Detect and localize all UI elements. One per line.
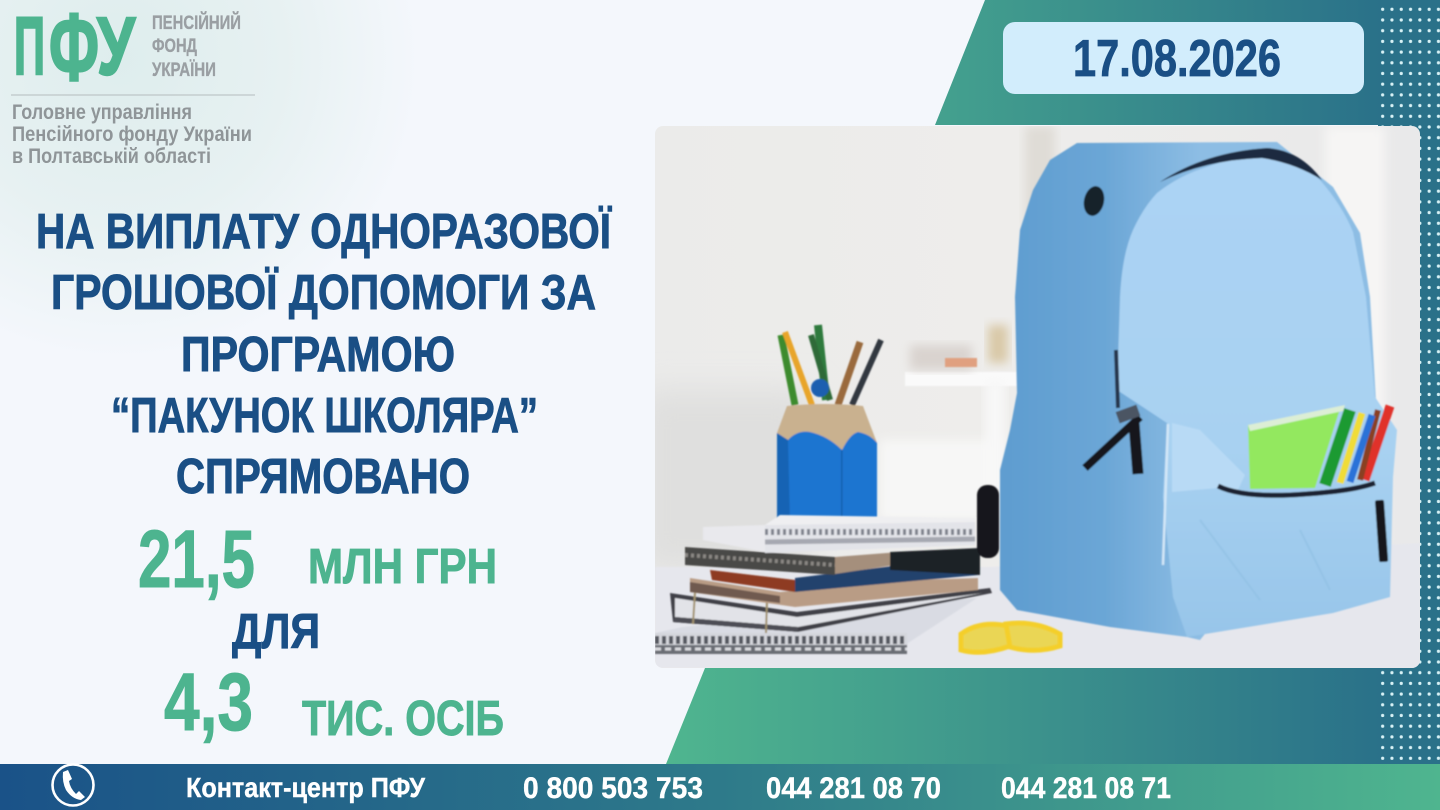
yellow scissors (961, 623, 1060, 652)
bottom spiral notebook (662, 598, 974, 642)
dark spiral notebook (685, 547, 835, 575)
pocket zipper pull (1375, 500, 1388, 562)
main heading: ГРОШОВОЇ ДОПОМОГИ ЗА (51, 266, 596, 320)
logo block (11, 0, 255, 168)
top teal banner (935, 0, 1440, 125)
backpack eyelet (1082, 185, 1106, 217)
backpack (1000, 142, 1397, 640)
contact centre label: Контакт-центр ПФУ (186, 772, 426, 803)
regional office name: Головне управління (12, 101, 192, 124)
logo wordmark: УКРАЇНИ (152, 60, 216, 81)
logo mark: У (97, 1, 136, 92)
logo wordmark: ПЕНСІЙНИЙ (152, 12, 241, 34)
fabric folds (1200, 520, 1302, 539)
photo: backpack and stationery (640, 126, 1420, 668)
backpack side panel (1000, 142, 1377, 640)
regional office name: в Полтавській області (12, 145, 211, 168)
date badge: 17.08.2026 (1073, 30, 1281, 88)
pencil cup with pencils (777, 325, 881, 523)
people unit: ТИС. ОСІБ (302, 692, 504, 746)
main heading: ПРОГРАМОЮ (181, 328, 455, 382)
amount value: 21,5 (138, 514, 255, 605)
logo mark (14, 0, 136, 101)
notebook stack (655, 485, 999, 654)
phone numbers: 0 800 503 753 (523, 772, 703, 805)
main heading: СПРЯМОВАНО (176, 450, 470, 504)
front pocket gather (1172, 423, 1245, 492)
connector word: ДЛЯ (232, 605, 320, 659)
logo wordmark (152, 12, 241, 81)
main heading (36, 205, 612, 504)
top white notebook (765, 515, 975, 525)
logo wordmark: ФОНД (152, 36, 197, 57)
phone numbers: 044 281 08 71 (1001, 772, 1171, 805)
footer bar (0, 764, 1440, 810)
main zipper pull (1085, 350, 1140, 474)
phone numbers (523, 772, 1171, 805)
blurred background room (640, 126, 1385, 570)
date badge (1003, 22, 1364, 94)
regional office name: Пенсійного фонду України (12, 123, 252, 146)
statistics (138, 514, 504, 748)
tan notebook (690, 578, 978, 607)
bottom teal banner (666, 668, 1440, 764)
logo mark: П (14, 1, 45, 92)
navy notebook (794, 566, 978, 593)
hardcover notebook (670, 588, 992, 632)
pocket notebook (1248, 405, 1345, 489)
main heading: “ПАКУНОК ШКОЛЯРА” (111, 389, 538, 443)
pocket pens (1325, 406, 1390, 485)
icon: phone (52, 764, 94, 806)
regional office name (12, 101, 252, 168)
amount unit: МЛН ГРН (308, 540, 497, 594)
background glow behind logo (0, 0, 440, 380)
pocket seam (1163, 424, 1168, 565)
right teal strip with dot pattern (1378, 0, 1440, 764)
pocket zipper (1218, 483, 1375, 495)
phone numbers: 044 281 08 70 (766, 772, 941, 805)
people value: 4,3 (164, 657, 253, 748)
table (656, 568, 1420, 668)
main heading: НА ВИПЛАТУ ОДНОРАЗОВОЇ (36, 205, 612, 259)
backpack top zipper (1160, 148, 1322, 182)
backpack front panel (1117, 158, 1397, 637)
